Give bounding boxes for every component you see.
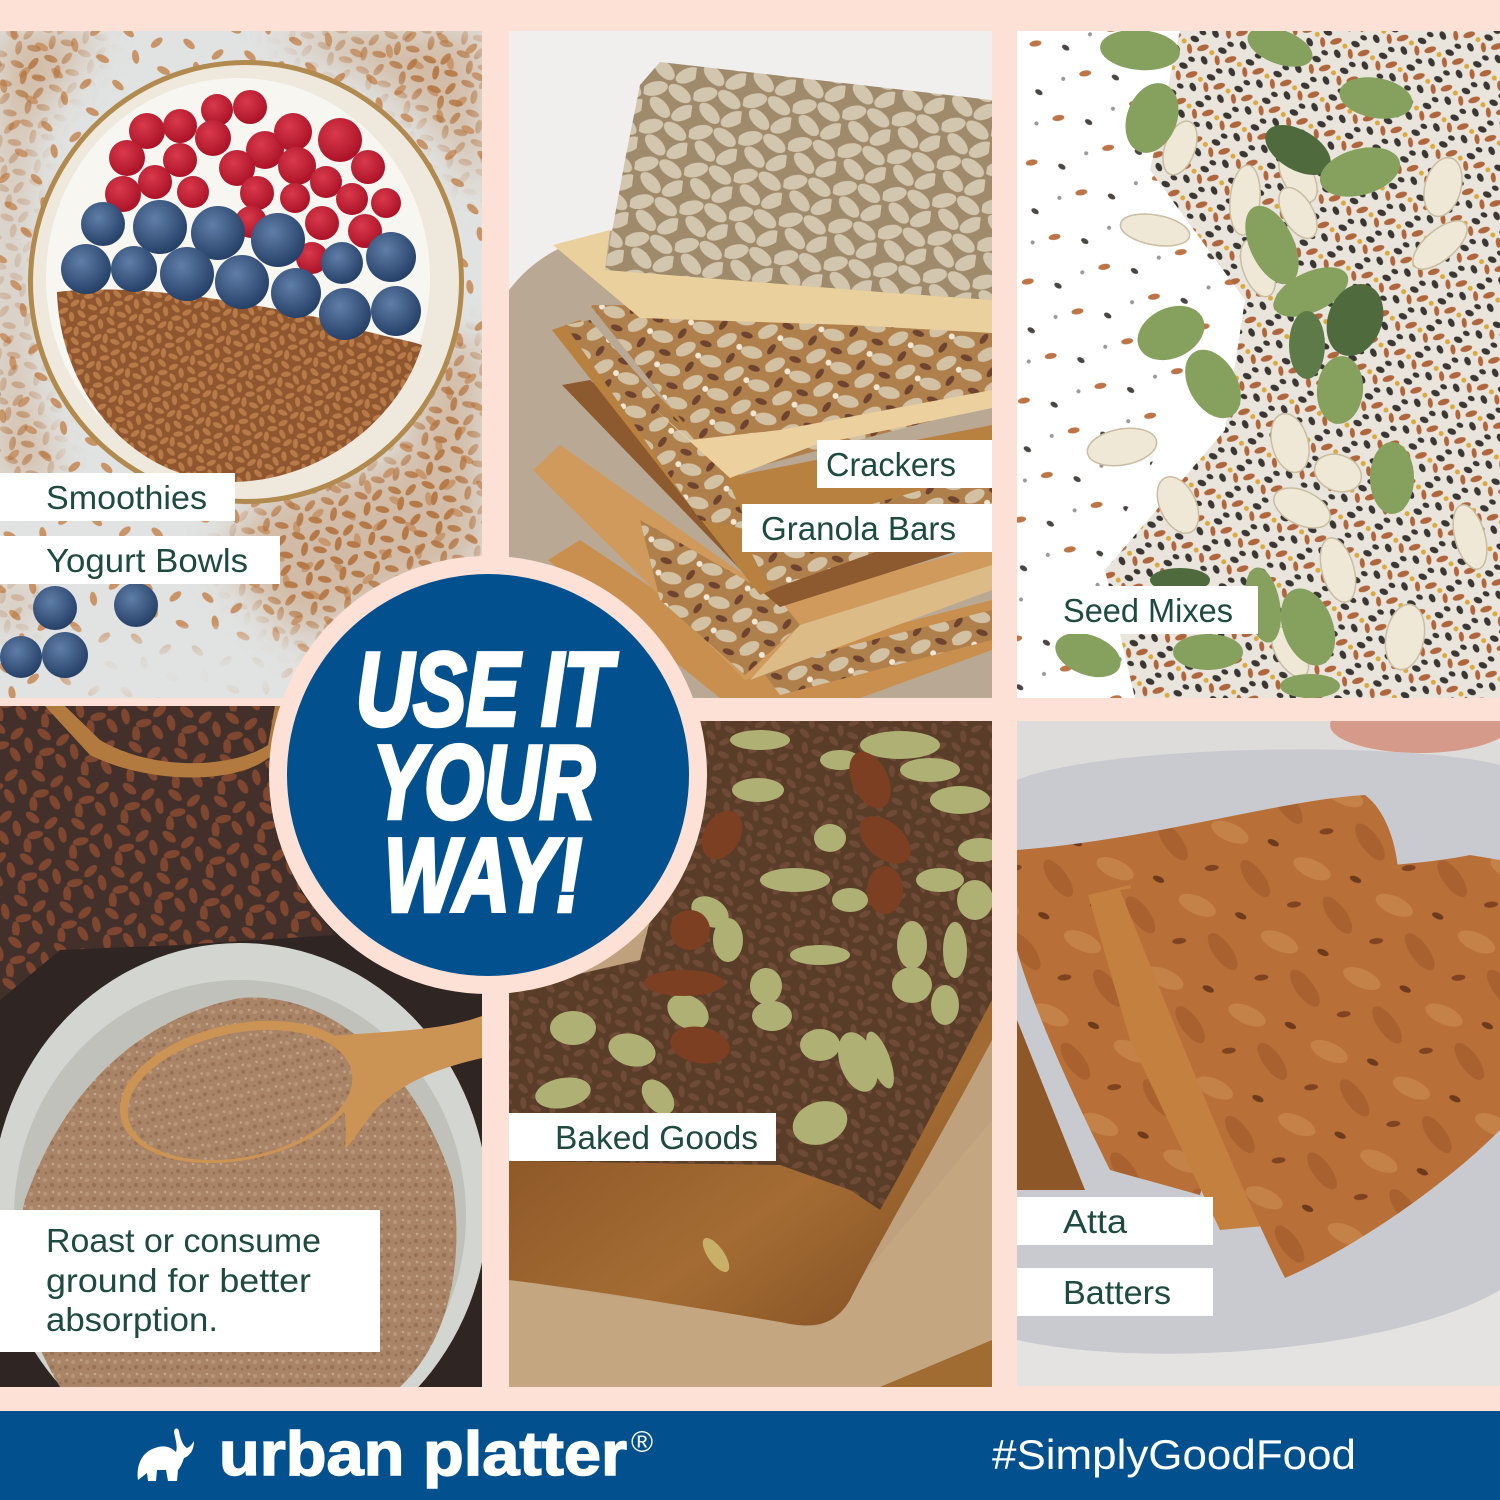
panel: crackers and granola bars photo bbox=[509, 31, 992, 698]
panel: atta and batters photo bbox=[1017, 697, 1500, 1386]
parathas bbox=[1017, 795, 1500, 1278]
panel: baked goods photo bbox=[509, 721, 1002, 1387]
flaxseed layer bbox=[57, 290, 422, 482]
icon: bowl bbox=[28, 60, 464, 504]
pumpkin seed on loaf side bbox=[702, 1238, 730, 1272]
panel: seed mixes photo bbox=[1017, 19, 1500, 698]
blueberries bbox=[61, 200, 421, 340]
footer band bbox=[0, 1411, 1500, 1500]
plate bbox=[0, 943, 482, 1387]
hashtag: #SimplyGoodFood bbox=[992, 1431, 1356, 1478]
lower cracker layers bbox=[533, 305, 992, 698]
callout: roast or consume ground: Roast or consume bbox=[46, 1222, 321, 1259]
label: crackers: Crackers bbox=[826, 446, 956, 483]
icon: wooden spoon bbox=[120, 1016, 482, 1164]
top cracker with sunflower seeds bbox=[605, 62, 992, 300]
panel: smoothies and yogurt bowls photo bbox=[0, 31, 482, 698]
label: crackers bbox=[817, 440, 992, 488]
wooden scoop bbox=[45, 706, 280, 778]
panel: roasted and ground flaxseed photo bbox=[0, 706, 482, 1387]
baking paper bbox=[509, 1120, 992, 1387]
loaf top crust bbox=[509, 721, 992, 1210]
label: batters: Batters bbox=[1063, 1274, 1171, 1311]
cranberries bbox=[105, 90, 401, 274]
brand name: urban platter bbox=[219, 1420, 627, 1489]
label: baked goods bbox=[509, 1113, 776, 1161]
label: yogurt bowls: Yogurt Bowls bbox=[46, 542, 248, 579]
badge heading bbox=[356, 632, 618, 934]
label: atta: Atta bbox=[1063, 1203, 1128, 1240]
white seeds bbox=[1084, 117, 1493, 683]
label: granola bars bbox=[742, 504, 992, 552]
registered mark: ® bbox=[631, 1426, 653, 1459]
ground flax bbox=[18, 998, 456, 1387]
label: batters bbox=[1017, 1268, 1213, 1316]
icon: elephant logo bbox=[138, 1428, 194, 1481]
label: granola bars: Granola Bars bbox=[761, 510, 956, 547]
badge heading: WAY! bbox=[384, 818, 582, 934]
plate bbox=[1017, 749, 1500, 1354]
badge heading: USE IT bbox=[356, 632, 618, 748]
pumpkin seeds and pecans bbox=[533, 730, 1002, 1152]
pumpkin seeds bbox=[1049, 19, 1416, 698]
label: atta bbox=[1017, 1197, 1213, 1245]
badge heading: YOUR bbox=[373, 725, 595, 841]
label: seed mixes: Seed Mixes bbox=[1063, 592, 1233, 629]
label: smoothies: Smoothies bbox=[46, 479, 207, 516]
badge: use it your way bbox=[269, 556, 707, 994]
loose blueberries bbox=[0, 583, 158, 678]
label: yogurt bowls bbox=[0, 536, 280, 584]
callout: roast or consume ground: ground for better bbox=[46, 1262, 311, 1299]
label: baked goods: Baked Goods bbox=[555, 1119, 758, 1156]
loaf side bbox=[509, 980, 992, 1326]
label: seed mixes bbox=[1035, 586, 1258, 634]
callout: roast or consume ground: absorption. bbox=[46, 1301, 218, 1338]
label: smoothies bbox=[0, 473, 235, 521]
callout: roast or consume ground bbox=[0, 1210, 380, 1352]
